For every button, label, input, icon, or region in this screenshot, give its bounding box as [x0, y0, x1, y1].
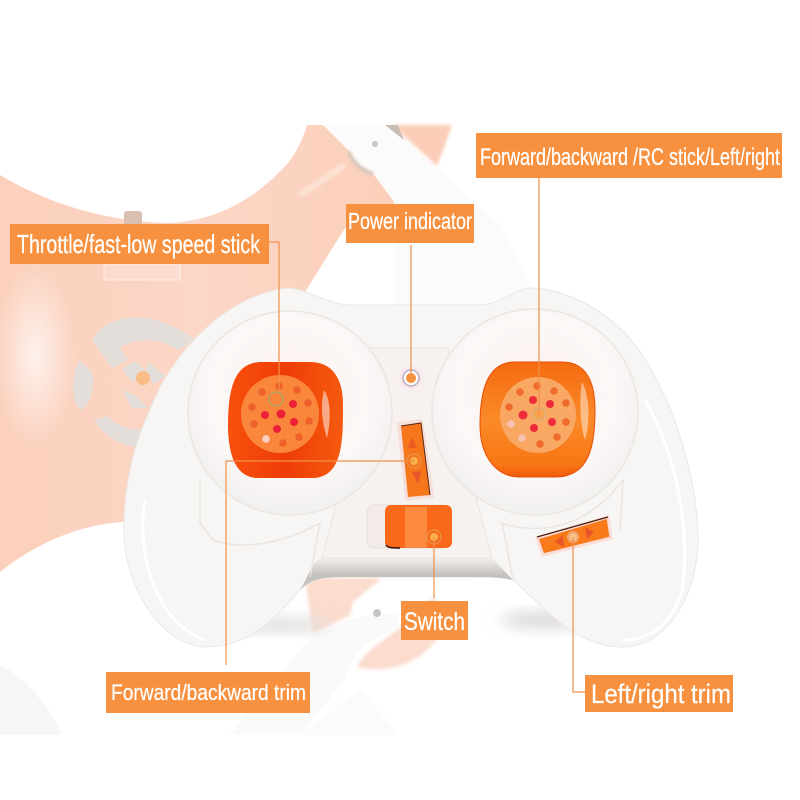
leader line: right stick [538, 178, 540, 414]
drone: upper right arm [392, 125, 452, 166]
right stick [480, 362, 595, 477]
drone: centre light [136, 371, 150, 385]
label: forward/backward trim [106, 672, 310, 713]
drone: lens mount [104, 264, 180, 280]
left stick dome [188, 311, 392, 515]
leader line: forward/backward trim [226, 461, 414, 665]
right stick dome [432, 309, 638, 515]
controller shadow [230, 611, 590, 632]
forward/backward trim button [399, 421, 432, 499]
label: power indicator: Power indicator [348, 208, 472, 234]
drone: glare [0, 260, 77, 450]
label: throttle stick: Throttle/fast-low speed stick [17, 229, 261, 259]
label: right stick [476, 133, 782, 178]
leader line: power indicator [410, 245, 412, 378]
left stick [228, 362, 343, 478]
label: power indicator [346, 204, 474, 243]
left/right trim button [537, 517, 611, 555]
leader line: switch [433, 537, 435, 598]
controller: centre channel moulding [322, 348, 492, 558]
leader line: left/right trim [573, 537, 585, 692]
drone: grey target rings [73, 317, 195, 449]
controller: grip panel lines [200, 480, 623, 580]
background drone: lower arm fragments [0, 578, 445, 735]
label: forward/backward trim: Forward/backward trim [111, 680, 306, 705]
leader line: throttle stick [269, 242, 279, 390]
label: throttle stick [10, 224, 269, 264]
controller: grey underside band [300, 558, 513, 590]
drone: top nub [124, 211, 142, 231]
drone: propeller blade [325, 125, 532, 305]
background drone: faded body [0, 125, 532, 572]
label: switch [401, 601, 468, 640]
drone: propeller hub edge [349, 152, 373, 174]
controller body [124, 288, 698, 647]
label: switch: Switch [404, 608, 465, 636]
drone: arm highlights [300, 165, 345, 195]
label: left/right trim: Left/right trim [591, 679, 731, 709]
drone: propeller pin [372, 141, 378, 147]
power switch [367, 505, 452, 548]
power indicator LED [394, 361, 428, 395]
